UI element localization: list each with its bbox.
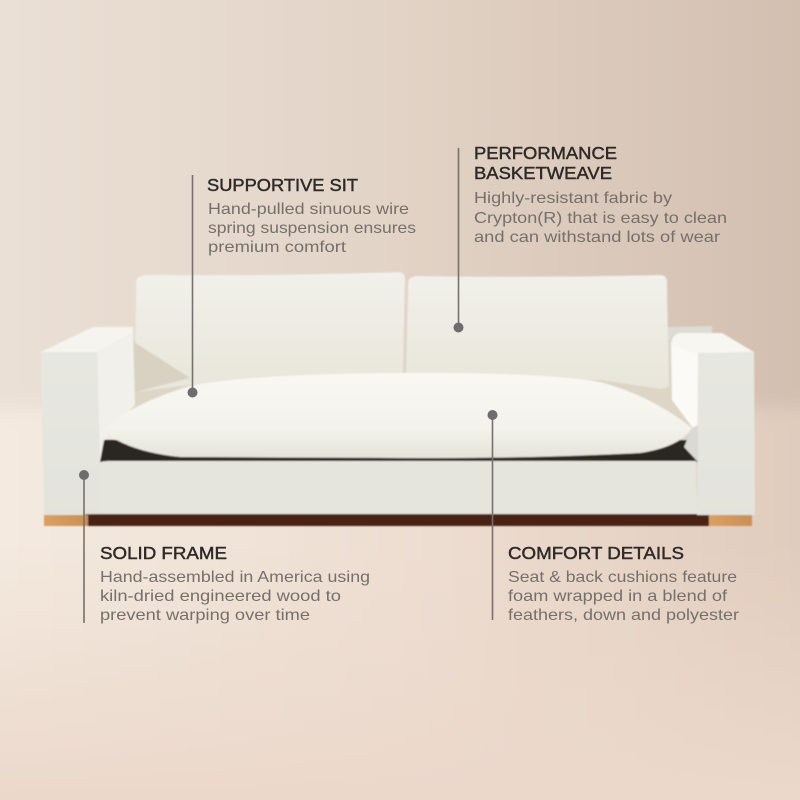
rear interior fill — [125, 340, 700, 455]
description: feathers, down and polyester — [508, 607, 740, 624]
heading: SUPPORTIVE SIT — [207, 175, 358, 195]
back cushion left — [135, 272, 405, 392]
right arm top — [671, 333, 754, 354]
deck shadow — [100, 440, 698, 462]
description: Crypton(R) that is easy to clean — [474, 210, 727, 227]
description: kiln-dried engineered wood to — [100, 588, 341, 605]
wooden leg left — [44, 515, 88, 526]
callout: comfort details — [488, 410, 740, 624]
wooden leg right — [709, 515, 752, 526]
callout: solid frame — [79, 470, 370, 624]
description: spring suspension ensures — [208, 220, 416, 237]
dot — [79, 470, 89, 480]
sofa — [41, 272, 755, 526]
description: foam wrapped in a blend of — [508, 588, 728, 605]
dot — [454, 322, 464, 332]
left arm top — [41, 327, 133, 352]
sofa shadow base — [85, 514, 710, 526]
description: prevent warping over time — [100, 607, 310, 624]
leader line — [192, 175, 194, 392]
base rail — [100, 461, 697, 514]
back cushion right — [406, 275, 669, 389]
heading: SOLID FRAME — [100, 543, 227, 563]
description: premium comfort — [208, 239, 347, 256]
description: Highly-resistant fabric by — [474, 190, 672, 207]
dot — [488, 410, 498, 420]
left arm front — [41, 352, 100, 515]
dot — [188, 388, 198, 398]
description: and can withstand lots of wear — [474, 229, 721, 246]
left arm inner face — [97, 331, 135, 460]
callout: performance basketweave — [454, 143, 727, 332]
leader line — [458, 148, 460, 327]
right arm inner face — [671, 342, 698, 435]
callout: supportive sit — [188, 175, 416, 398]
left arm inside shadow — [134, 342, 190, 392]
heading: COMFORT DETAILS — [508, 543, 684, 563]
description: Hand-assembled in America using — [100, 569, 370, 586]
heading: BASKETWEAVE — [474, 163, 612, 183]
seat cushion — [102, 373, 692, 458]
far arm behind right — [666, 326, 712, 345]
description: Seat & back cushions feature — [508, 569, 737, 586]
leader line — [83, 475, 85, 623]
right arm front — [697, 352, 755, 515]
heading: PERFORMANCE — [474, 143, 617, 163]
description: Hand-pulled sinuous wire — [208, 201, 409, 218]
right arm lower join — [684, 425, 698, 462]
leader line — [492, 415, 494, 620]
